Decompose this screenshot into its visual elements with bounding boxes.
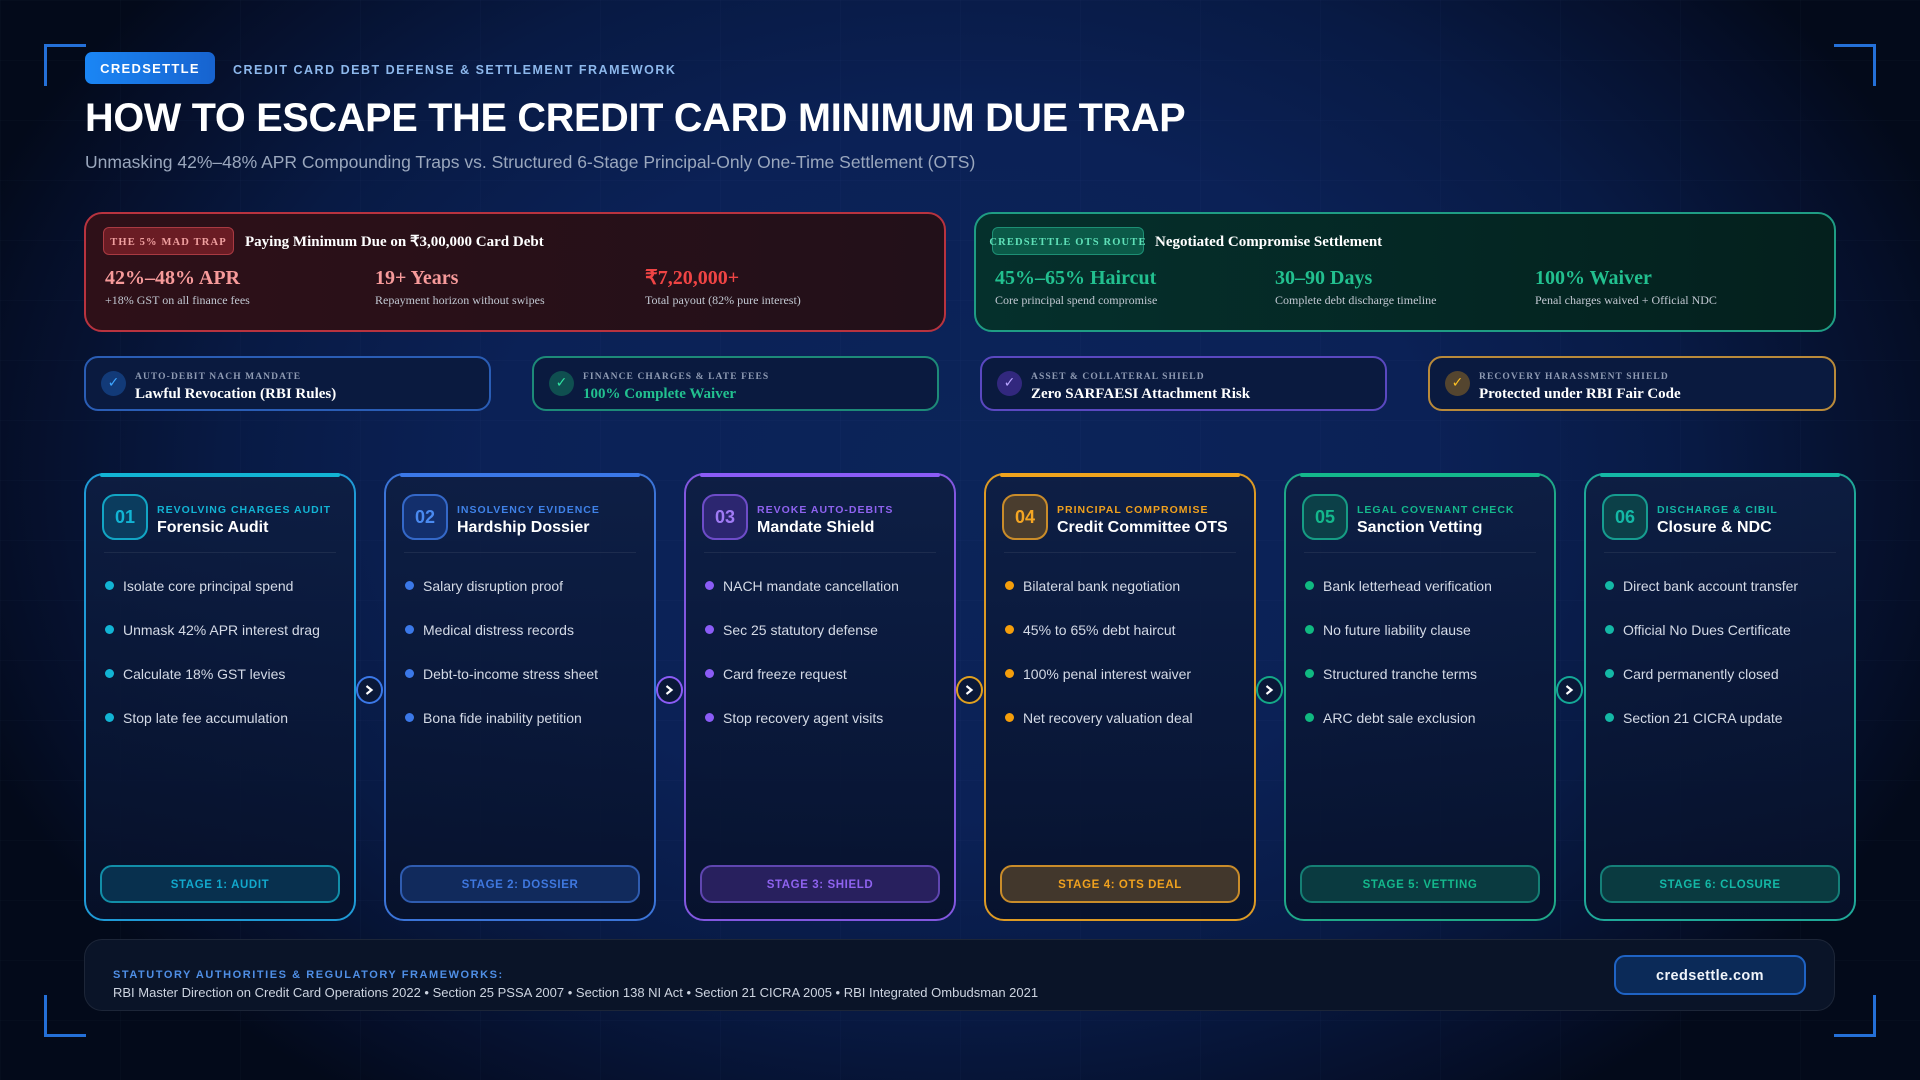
shield label: RECOVERY HARASSMENT SHIELD bbox=[1479, 372, 1669, 382]
panel: stage 2 bbox=[384, 473, 656, 921]
bullet: Stop late fee accumulation bbox=[123, 710, 288, 726]
bullet: 45% to 65% debt haircut bbox=[1023, 622, 1176, 638]
bullet: Unmask 42% APR interest drag bbox=[123, 622, 320, 638]
stage button: STAGE 3: SHIELD bbox=[767, 879, 873, 891]
bullet: Medical distress records bbox=[423, 622, 574, 638]
stage eyebrow: REVOKE AUTO-DEBITS bbox=[757, 504, 893, 516]
shield label: ASSET & COLLATERAL SHIELD bbox=[1031, 372, 1205, 382]
top accent bbox=[100, 473, 340, 477]
website button: credsettle.com bbox=[1656, 968, 1764, 984]
stage button: STAGE 2: DOSSIER bbox=[462, 879, 578, 891]
bullet: Card permanently closed bbox=[1623, 666, 1779, 682]
icon: check bbox=[549, 371, 574, 396]
bullet: Sec 25 statutory defense bbox=[723, 622, 878, 638]
stage title: Sanction Vetting bbox=[1357, 519, 1482, 536]
bullet: Debt-to-income stress sheet bbox=[423, 666, 598, 682]
stat: years bbox=[375, 267, 545, 307]
stat: days: 30–90 Days bbox=[1275, 267, 1372, 289]
number: 05 bbox=[1315, 507, 1335, 527]
bullet: Card freeze request bbox=[723, 666, 847, 682]
bullet: Net recovery valuation deal bbox=[1023, 710, 1193, 726]
bullet: Official No Dues Certificate bbox=[1623, 622, 1791, 638]
icon: check bbox=[997, 371, 1022, 396]
number: 04 bbox=[1015, 507, 1035, 527]
shield label: AUTO-DEBIT NACH MANDATE bbox=[135, 372, 301, 382]
trap heading: Paying Minimum Due on ₹3,00,000 Card Debt bbox=[245, 234, 544, 250]
corner bracket: bottom left bbox=[44, 995, 86, 1037]
icon: check: ✓ bbox=[1004, 375, 1015, 391]
stage eyebrow: REVOLVING CHARGES AUDIT bbox=[157, 504, 331, 516]
bullet: Section 21 CICRA update bbox=[1623, 710, 1783, 726]
bullet: Direct bank account transfer bbox=[1623, 578, 1798, 594]
shield: finance charges bbox=[532, 356, 939, 411]
OTS tag bbox=[992, 227, 1144, 255]
panel: stage 5 bbox=[1284, 473, 1556, 921]
panel: stage 6 bbox=[1584, 473, 1856, 921]
footer heading: STATUTORY AUTHORITIES & REGULATORY FRAMEWORKS: bbox=[113, 969, 504, 981]
number bbox=[1602, 494, 1648, 540]
OTS heading: Negotiated Compromise Settlement bbox=[1155, 234, 1382, 250]
framework eyebrow: CREDIT CARD DEBT DEFENSE & SETTLEMENT FRAMEWORK bbox=[233, 63, 676, 77]
icon: check: ✓ bbox=[556, 375, 567, 391]
shield value: Protected under RBI Fair Code bbox=[1479, 386, 1681, 402]
stage title: Hardship Dossier bbox=[457, 519, 589, 536]
number: 01 bbox=[115, 507, 135, 527]
stage title: Credit Committee OTS bbox=[1057, 519, 1228, 536]
stat: payout bbox=[645, 267, 801, 307]
trap tag bbox=[103, 227, 234, 255]
title: HOW TO ESCAPE THE CREDIT CARD MINIMUM DUE TRAP bbox=[85, 96, 1185, 140]
stat: payout: Total payout (82% pure interest) bbox=[645, 293, 801, 307]
panel: Credsettle OTS route bbox=[974, 212, 1836, 332]
shield: recovery bbox=[1428, 356, 1836, 411]
arrow: stage 2 to 3 bbox=[656, 676, 683, 704]
corner bracket: bottom right bbox=[1834, 995, 1876, 1037]
number bbox=[102, 494, 148, 540]
stage button bbox=[1000, 865, 1240, 903]
footer citations: RBI Master Direction on Credit Card Operations 2022 • Section 25 PSSA 2007 • Section 138 NI Act • Section 21 CICRA 2005 • RBI Integrated Ombudsman 2021 bbox=[113, 985, 1038, 1000]
arrow: stage 3 to 4 bbox=[956, 676, 983, 704]
bullet: Isolate core principal spend bbox=[123, 578, 293, 594]
top accent bbox=[1300, 473, 1540, 477]
number bbox=[402, 494, 448, 540]
stage button: STAGE 6: CLOSURE bbox=[1659, 879, 1781, 891]
panel: regulatory footer bbox=[84, 939, 1835, 1011]
stat: years: Repayment horizon without swipes bbox=[375, 293, 545, 307]
stage title: Forensic Audit bbox=[157, 519, 268, 536]
number bbox=[1002, 494, 1048, 540]
stat: waiver: Penal charges waived + Official NDC bbox=[1535, 293, 1717, 307]
number: 06 bbox=[1615, 507, 1635, 527]
stat: waiver: 100% Waiver bbox=[1535, 267, 1652, 289]
shield value: 100% Complete Waiver bbox=[583, 386, 736, 402]
bullet: Stop recovery agent visits bbox=[723, 710, 883, 726]
stat: years: 19+ Years bbox=[375, 267, 458, 289]
panel: the 5% MAD trap bbox=[84, 212, 946, 332]
shield: auto-debit bbox=[84, 356, 491, 411]
bullet: Bilateral bank negotiation bbox=[1023, 578, 1180, 594]
stat: waiver bbox=[1535, 267, 1717, 307]
number bbox=[702, 494, 748, 540]
stat: APR: +18% GST on all finance fees bbox=[105, 293, 250, 307]
panel: stage 3 bbox=[684, 473, 956, 921]
bullet: ARC debt sale exclusion bbox=[1323, 710, 1476, 726]
top accent bbox=[700, 473, 940, 477]
icon: check: ✓ bbox=[108, 375, 119, 391]
top accent bbox=[1000, 473, 1240, 477]
stage button: STAGE 4: OTS DEAL bbox=[1058, 879, 1182, 891]
stage title: Mandate Shield bbox=[757, 519, 874, 536]
corner bracket: top left bbox=[44, 44, 86, 86]
brand badge: CREDSETTLE bbox=[100, 61, 200, 76]
bullet: Salary disruption proof bbox=[423, 578, 563, 594]
stage eyebrow: INSOLVENCY EVIDENCE bbox=[457, 504, 600, 516]
bullet: NACH mandate cancellation bbox=[723, 578, 899, 594]
panel: stage 1 bbox=[84, 473, 356, 921]
arrow: stage 5 to 6 bbox=[1556, 676, 1583, 704]
stage button: STAGE 1: AUDIT bbox=[171, 879, 269, 891]
stat: APR bbox=[105, 267, 250, 307]
subtitle: Unmasking 42%–48% APR Compounding Traps vs. Structured 6-Stage Principal-Only One-Time Settlement (OTS) bbox=[85, 152, 975, 172]
stat: haircut: Core principal spend compromise bbox=[995, 293, 1157, 307]
shield: asset bbox=[980, 356, 1387, 411]
website button bbox=[1614, 955, 1806, 995]
trap tag: THE 5% MAD TRAP bbox=[110, 236, 227, 248]
number bbox=[1302, 494, 1348, 540]
shield value: Zero SARFAESI Attachment Risk bbox=[1031, 386, 1250, 402]
icon: check bbox=[1445, 371, 1470, 396]
stage button bbox=[1600, 865, 1840, 903]
panel: stage 4 bbox=[984, 473, 1256, 921]
arrow: stage 4 to 5 bbox=[1256, 676, 1283, 704]
stat: APR: 42%–48% APR bbox=[105, 267, 240, 289]
brand badge bbox=[85, 52, 215, 84]
stat: haircut: 45%–65% Haircut bbox=[995, 267, 1156, 289]
stage button bbox=[400, 865, 640, 903]
bullet: Bona fide inability petition bbox=[423, 710, 582, 726]
stage button: STAGE 5: VETTING bbox=[1363, 879, 1477, 891]
bullet: Structured tranche terms bbox=[1323, 666, 1477, 682]
stage eyebrow: PRINCIPAL COMPROMISE bbox=[1057, 504, 1208, 516]
arrow: stage 1 to 2 bbox=[356, 676, 383, 704]
stage button bbox=[700, 865, 940, 903]
stat: haircut bbox=[995, 267, 1157, 307]
top accent bbox=[1600, 473, 1840, 477]
bullet: 100% penal interest waiver bbox=[1023, 666, 1191, 682]
icon: check: ✓ bbox=[1452, 375, 1463, 391]
number: 02 bbox=[415, 507, 435, 527]
stage button bbox=[100, 865, 340, 903]
corner bracket: top right bbox=[1834, 44, 1876, 86]
bullet: No future liability clause bbox=[1323, 622, 1471, 638]
bullet: Calculate 18% GST levies bbox=[123, 666, 285, 682]
stat: payout: ₹7,20,000+ bbox=[645, 267, 739, 289]
shield label: FINANCE CHARGES & LATE FEES bbox=[583, 372, 769, 382]
stat: days bbox=[1275, 267, 1436, 307]
shield value: Lawful Revocation (RBI Rules) bbox=[135, 386, 336, 402]
stage button bbox=[1300, 865, 1540, 903]
top accent bbox=[400, 473, 640, 477]
stage title: Closure & NDC bbox=[1657, 519, 1772, 536]
bullet: Bank letterhead verification bbox=[1323, 578, 1492, 594]
OTS tag: CREDSETTLE OTS ROUTE bbox=[989, 236, 1147, 248]
icon: check bbox=[101, 371, 126, 396]
stage eyebrow: DISCHARGE & CIBIL bbox=[1657, 504, 1778, 516]
stat: days: Complete debt discharge timeline bbox=[1275, 293, 1436, 307]
stage eyebrow: LEGAL COVENANT CHECK bbox=[1357, 504, 1514, 516]
number: 03 bbox=[715, 507, 735, 527]
